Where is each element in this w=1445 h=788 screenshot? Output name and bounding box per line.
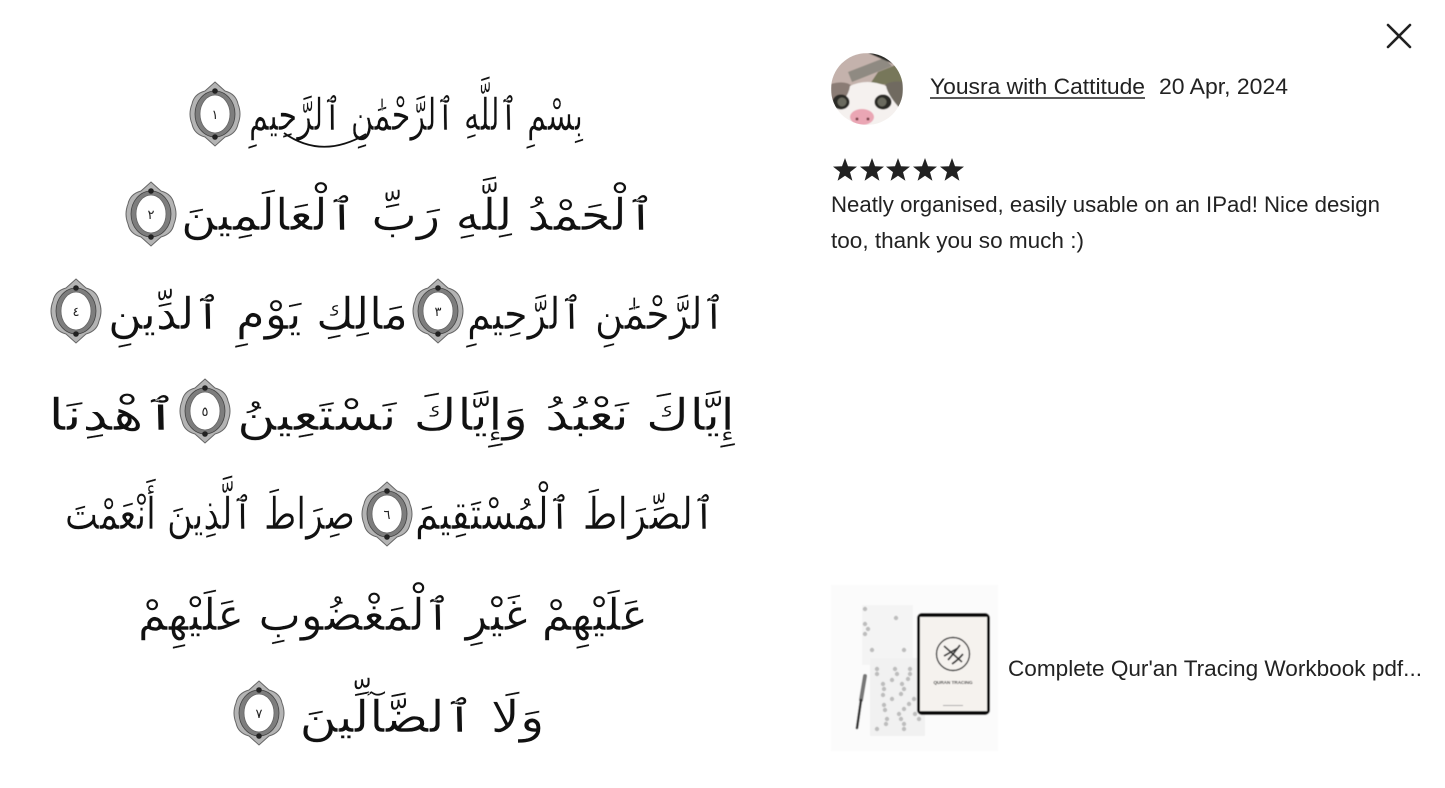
reviewer name: Yousra with Cattitude [930,74,1145,99]
verse 7 second line: ٧ [256,707,263,722]
review text: Neatly organised, easily usable on an IPad! Nice design [831,192,1380,217]
pen [857,676,865,728]
verse 3 and 4 line: ٤ [73,305,79,320]
verse 5 line: ٱهْدِنَا [48,390,178,441]
verse 6 line: صِرَاطَ ٱلَّذِينَ أَنْعَمْتَ [65,475,355,540]
verse 3 and 4 line [51,279,725,349]
icon: reviewer avatar cat [831,53,903,125]
product thumbnail [831,585,998,751]
review date: 20 Apr, 2024 [1159,74,1288,99]
panel: Quran verses [48,76,736,745]
review text [831,192,1380,253]
verse 6 line: ٱلصِّرَاطَ ٱلْمُسْتَقِيمَ [415,480,715,540]
verse 5 line: إِيَّاكَ نَعْبُدُ وَإِيَّاكَ نَسْتَعِينُ [237,390,736,449]
tablet [917,613,990,715]
tablet: QURAN TRACING [933,680,973,685]
verse 5 line: ٥ [202,405,209,420]
verse 6 line [65,475,715,546]
verse 1 line [190,76,584,150]
verse 7 second line: وَلَا ٱلضَّآلِّينَ [300,677,544,743]
verse 6 line: ٦ [384,508,391,523]
verse 2 line [126,176,655,246]
verse 2 line: ٢ [148,208,155,223]
verse 1 line: بِسْمِ ٱللَّهِ ٱلرَّحْمَٰنِ ٱلرَّحِيمِ [248,76,584,150]
verse 5 line [48,379,736,449]
verse 3 and 4 line: ٱلرَّحْمَٰنِ ٱلرَّحِيمِ [465,289,725,349]
verse 7 second line [234,677,544,745]
product title: Complete Qur'an Tracing Workbook pdf... [1008,656,1422,681]
verse 3 and 4 line: مَالِكِ يَوْمِ ٱلدِّينِ [108,288,408,349]
name underline [930,97,1145,99]
verse 7 first line: عَلَيْهِمْ غَيْرِ ٱلْمَغْضُوبِ عَلَيْهِمْ [138,581,648,650]
icon: close button [1388,25,1410,47]
worksheet pages [862,605,925,736]
verse 1 line: ١ [212,108,218,123]
icon: five star rating [833,158,964,181]
verse 3 and 4 line: ٣ [435,305,442,320]
review text: too, thank you so much :) [831,228,1084,253]
verse 2 line: ٱلْحَمْدُ لِلَّهِ رَبِّ ٱلْعَالَمِينَ [181,176,655,241]
